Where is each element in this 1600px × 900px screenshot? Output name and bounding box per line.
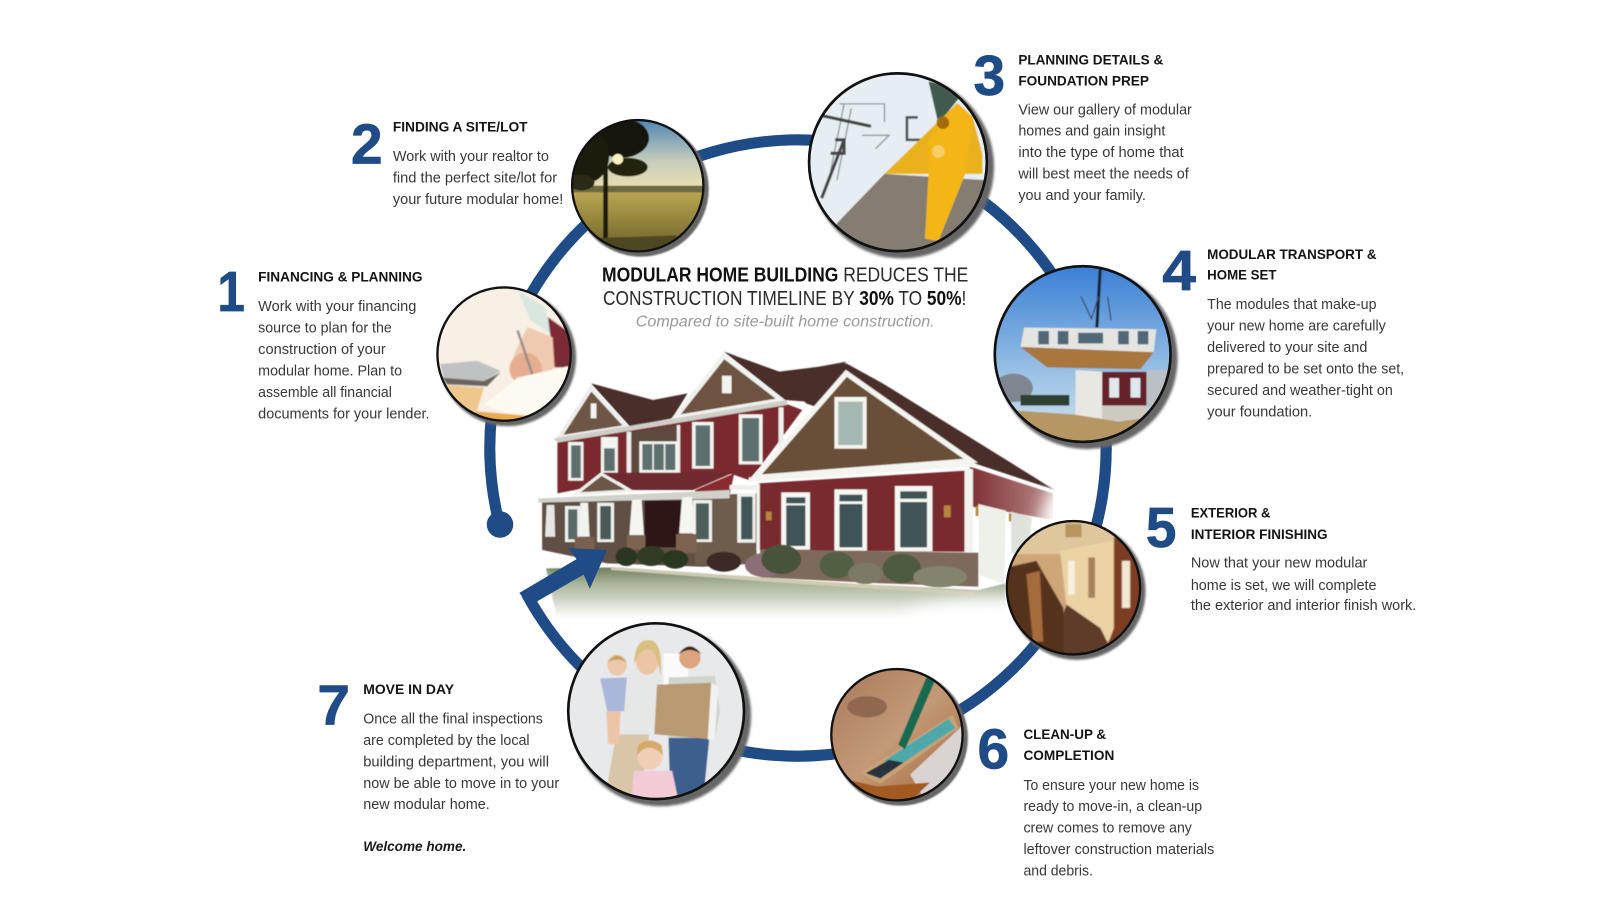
body: Work with your financing [258, 299, 416, 315]
heading [1023, 727, 1114, 764]
body: construction of your [258, 342, 386, 358]
step 2 text [351, 112, 563, 208]
center headline [602, 265, 968, 331]
body: your foundation. [1207, 404, 1312, 420]
body: your future modular home! [393, 192, 563, 208]
body: source to plan for the [258, 321, 392, 337]
body: now be able to move in to your [363, 776, 559, 792]
step 5 text [1146, 496, 1416, 614]
heading: EXTERIOR & [1191, 505, 1270, 521]
heading: MOVE IN DAY [363, 682, 455, 698]
number 3: 3 [973, 44, 1005, 107]
shrubs [616, 545, 967, 587]
body: homes and gain insight [1018, 124, 1165, 140]
photo circle 4: transport [994, 265, 1178, 449]
heading [1207, 247, 1377, 284]
step 1 text [217, 260, 430, 422]
middle gable [675, 356, 781, 417]
garage doors [978, 504, 1006, 584]
body: prepared to be set onto the set, [1207, 361, 1404, 377]
arrow into house [519, 548, 607, 609]
headline subtitle: Compared to site-built home construction. [636, 314, 935, 331]
number 6: 6 [978, 717, 1009, 780]
body: building department, you will [363, 754, 549, 770]
photo circle 2: site [567, 118, 709, 257]
photo circle 6: cleaning [831, 668, 968, 806]
body: the exterior and interior finish work. [1191, 598, 1416, 614]
heading: HOME SET [1207, 268, 1277, 284]
walkway [611, 567, 974, 595]
photo edge fade [477, 477, 1108, 657]
body [393, 149, 563, 208]
body: secured and weather-tight on [1207, 383, 1393, 399]
heading: MODULAR TRANSPORT & [1207, 247, 1377, 263]
body: assemble all financial [258, 385, 392, 401]
heading: PLANNING DETAILS & [1018, 52, 1163, 68]
process ring [490, 140, 1106, 756]
body: find the perfect site/lot for [393, 171, 557, 187]
photo circle 7: family move in [567, 622, 751, 806]
body: ready to move-in, a clean-up [1023, 799, 1202, 815]
number 5: 5 [1146, 496, 1177, 559]
lawn [546, 567, 1005, 620]
heading: FOUNDATION PREP [1018, 74, 1149, 90]
body: Now that your new modular [1191, 555, 1367, 571]
body: The modules that make-up [1207, 297, 1377, 313]
main roof [591, 352, 1055, 490]
upper windows [568, 397, 867, 481]
body: modular home. Plan to [258, 364, 402, 380]
heading: INTERIOR FINISHING [1191, 527, 1328, 543]
lower windows [781, 486, 932, 551]
stone base [760, 549, 978, 587]
body: Work with your realtor to [393, 149, 549, 165]
headline line 1: MODULAR HOME BUILDING REDUCES THE [602, 265, 968, 287]
body: you and your family. [1018, 188, 1146, 204]
step 6 text [978, 717, 1214, 880]
body: and debris. [1023, 864, 1093, 880]
body: documents for your lender. [258, 406, 430, 422]
step 3 text [973, 44, 1192, 204]
body: leftover construction materials [1023, 842, 1214, 858]
body: your new home are carefully [1207, 319, 1386, 335]
photo circle 3: plans and foundation [808, 72, 994, 258]
lower red wall [758, 471, 966, 552]
body [1023, 778, 1214, 880]
body: crew comes to remove any [1023, 821, 1193, 837]
heading [1018, 52, 1163, 90]
step 7 text [317, 673, 559, 855]
number 2: 2 [351, 112, 383, 175]
number 1: 1 [217, 260, 245, 323]
body: View our gallery of modular [1018, 102, 1192, 118]
upper red wall [557, 403, 802, 493]
body [1191, 555, 1416, 614]
body: into the type of home that [1018, 145, 1184, 161]
photo circle 1: financing [437, 287, 576, 426]
heading: CLEAN-UP & [1023, 727, 1106, 743]
house illustration [477, 352, 1108, 657]
body: will best meet the needs of [1017, 167, 1190, 183]
photo circle 5: interior [1006, 520, 1146, 660]
closing line: Welcome home. [363, 839, 466, 855]
heading: FINANCING & PLANNING [258, 270, 422, 286]
porch [538, 473, 756, 567]
body: new modular home. [363, 797, 490, 813]
side wall [970, 467, 1053, 520]
heading: FINDING A SITE/LOT [393, 120, 528, 136]
number 4: 4 [1162, 239, 1196, 302]
headline line 2: CONSTRUCTION TIMELINE BY 30% TO 50%! [603, 288, 966, 310]
body: are completed by the local [363, 733, 530, 749]
body: Once all the final inspections [363, 711, 543, 727]
lamps [766, 505, 1014, 521]
heading: COMPLETION [1023, 748, 1114, 764]
ring start dot [487, 511, 513, 538]
infographic: modular home building process [220, 55, 1415, 876]
body: delivered to your site and [1207, 340, 1367, 356]
front gable [756, 373, 971, 477]
left gable [559, 388, 626, 437]
body [1017, 102, 1192, 204]
body: home is set, we will complete [1191, 578, 1377, 594]
body [363, 711, 559, 813]
eave band [554, 400, 787, 443]
number 7: 7 [317, 673, 350, 736]
body: To ensure your new home is [1023, 778, 1199, 794]
body [258, 299, 430, 422]
step 4 text [1162, 239, 1404, 420]
heading [1191, 505, 1328, 543]
body [1207, 297, 1404, 420]
